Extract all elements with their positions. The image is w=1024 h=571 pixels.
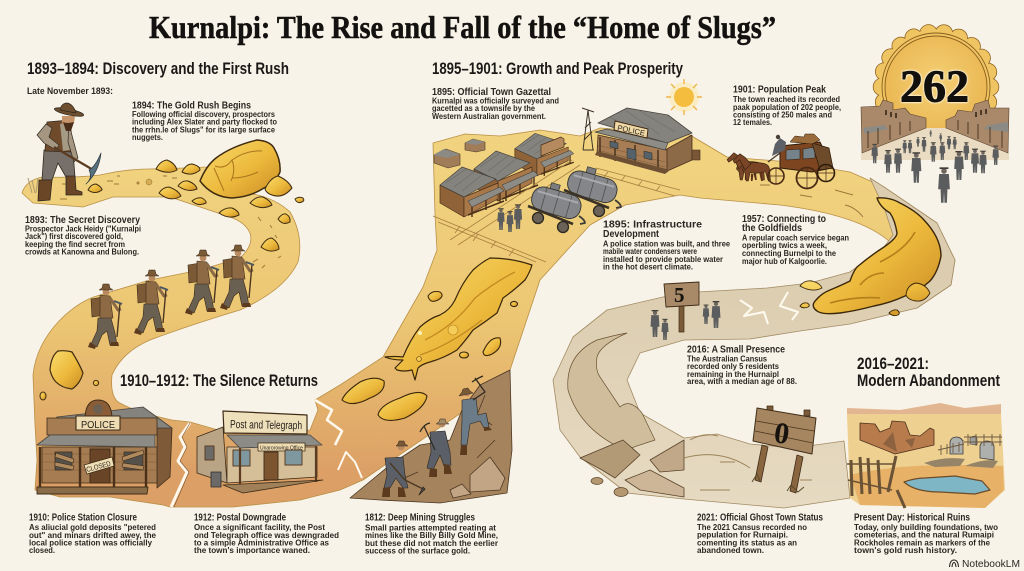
text block: present day ruins: Today, only building foundations, two (854, 523, 998, 532)
text block: 1895 infrastructure: mabile water condensers were (603, 247, 697, 256)
crowd of residents (871, 130, 999, 203)
icon: three townspeople (497, 204, 522, 232)
illustration: closed police station (37, 400, 172, 494)
street scene (861, 100, 1009, 160)
illustration: closed police station: POLICE (81, 419, 115, 431)
text block: 2016 small presence: 2016: A Small Presence (687, 344, 785, 356)
icon: signpost 0 (752, 406, 816, 493)
text block: 1901 population peak: consisting of 250 males and (733, 110, 832, 120)
text block: 1895 town gazetted (432, 87, 559, 121)
text block: present day ruins: town's gold rush history. (854, 546, 957, 555)
text block: 1895 infrastructure: 1895: Infrastructure (603, 220, 702, 230)
illustration: town police station: POLICE (617, 123, 646, 138)
text block: 1957 goldfields connection: major hub of Kalgoorlie. (742, 257, 827, 266)
text block: 1812 deep mining (365, 512, 498, 556)
icon: group of prospectors walking (88, 245, 254, 349)
icon: signpost 5: 5 (674, 283, 684, 307)
section heading: silence returns: 1910–1912: The Silence Returns (120, 371, 318, 390)
text block: 2016 small presence: The Australian Cansus (687, 354, 768, 364)
ruined brick walls (860, 421, 934, 454)
text block: 1893 secret discovery: 1893: The Secret Discovery (25, 215, 140, 226)
text block: 1894 gold rush: the rrhn.le of Slugs" for its large surface (132, 126, 276, 134)
text block: 1893 secret discovery (25, 215, 141, 256)
text block: 2016 small presence (687, 344, 797, 386)
text block: 2021 ghost town: 2021: Official Ghost Town Status (697, 512, 823, 524)
illustration: town buildings (433, 108, 594, 217)
text block: 1894 gold rush: Following official discovery, prospectors (132, 110, 276, 119)
text block: 1901 population peak: 1901: Population Peak (733, 84, 826, 96)
text block: 2021 ghost town: abandoned town. (697, 546, 764, 555)
text block: 2021 ghost town: The 2021 Cansus recorded no (697, 523, 807, 532)
text block: 1901 population peak: The town reached its recorded (733, 95, 840, 104)
text block: 1912 postal downgrade: to a simple Administrative Office as (194, 538, 330, 548)
road crack between police station and post office (171, 400, 362, 507)
text block: present day ruins: Present Day: Historical Ruins (854, 512, 970, 524)
badge: population 262 with crowd: 262 (900, 60, 969, 112)
text block: present day ruins: Rockholes remain as markers of the (854, 538, 991, 548)
text block: 1895 town gazetted: Western Australian government. (432, 112, 546, 121)
icon: gold nuggets (40, 140, 304, 400)
text block: 1893 secret discovery: crowds at Kanowna and Bulong. (25, 248, 139, 256)
text block: 1957 goldfields connection: operbling twics a week, (742, 241, 827, 250)
text block: 1894 gold rush: nuggets. (132, 133, 163, 142)
text block: 1912 postal downgrade (194, 512, 339, 555)
text block: 1895 infrastructure: A police station was built, and three (603, 240, 731, 248)
section heading: discovery: 1893–1894: Discovery and the First Rush (27, 59, 289, 78)
text block: 1893 secret discovery: keeping the find secret from (25, 240, 125, 249)
text block: 2021 ghost town (697, 512, 823, 555)
notebooklm wordmark: NotebookLM (962, 559, 1020, 570)
icon: gold nuggets on lower road (342, 292, 518, 420)
text block: 1894 gold rush: 1894: The Gold Rush Begins (132, 100, 251, 112)
icon: prospector with pick (28, 103, 101, 201)
text block: 2016 small presence: remaining in the Hurnaipl (687, 370, 779, 379)
text block: 1812 deep mining: success of the surface gold. (365, 546, 470, 556)
icon: signpost 0: 0 (772, 416, 791, 451)
section heading: modern abandonment (857, 354, 1000, 390)
icon: water tanks on wagons (528, 163, 621, 232)
text block: 1910 police closure: out" and minars drifted awey, the (29, 531, 157, 540)
water hole (904, 476, 990, 494)
text block: 1910 police closure (29, 512, 157, 555)
text block: 1901 population peak: 12 temales. (733, 118, 772, 127)
text block: 2021 ghost town: pepulation for Rurnaipi. (697, 530, 788, 540)
text block: present day ruins: cometerias, and the natural Rumaipi (854, 530, 994, 540)
icon: signpost 5 (664, 282, 699, 332)
text block: 1910 police closure: closed. (29, 546, 55, 555)
section heading: modern abandonment: 2016–2021: (857, 354, 929, 373)
text block: 1895 infrastructure: Development (603, 229, 660, 240)
illustration: town police station (595, 108, 700, 174)
text block: 1912 postal downgrade: 1912: Postal Downgrade (194, 512, 286, 524)
icon: remaining residents (651, 301, 720, 340)
icon: gold slug on road (385, 258, 532, 380)
text block: 1812 deep mining: mines like the Billy Billy Gold Mine, (365, 531, 498, 540)
icon: windmill (582, 108, 594, 150)
dusty road: decline section (553, 178, 955, 508)
text block: 2021 ghost town: comenting its status as an (697, 538, 797, 548)
text block: 1910 police closure: local police station was officially (29, 538, 153, 548)
title: Kurnalpi: The Rise and Fall of the “Home of Slugs” (149, 9, 776, 45)
badge: population 262 with crowd (861, 30, 1009, 203)
text block: 1893 secret discovery: Prospector Jack Heidy ("Kurnalpi (25, 224, 141, 234)
text block: 1957 goldfields connection: the Goldfields (742, 223, 802, 234)
text block: 1812 deep mining: Small parties attempted reating at (365, 524, 496, 532)
text block: 1894 gold rush (132, 100, 277, 142)
illustration: closed police station: CLOSED (86, 461, 112, 474)
section heading: growth: 1895–1901: Growth and Peak Prosperity (432, 59, 683, 78)
illustration: historical ruins and rockhole (847, 403, 1005, 508)
text block: present day ruins (854, 512, 998, 555)
text block: 1895 infrastructure: in the hot desert climate. (603, 262, 693, 272)
fences (938, 434, 1002, 455)
text block: 1893 secret discovery: Jack") first discovered gold, (25, 232, 123, 241)
text block: 1895 town gazetted: gacetted as a townsife by the (432, 104, 536, 113)
text block: 1957 goldfields connection (742, 214, 849, 266)
text block: 1957 goldfields connection: A repular coach service began (742, 234, 849, 242)
text block: 1812 deep mining: 1812: Deep Mining Struggles (365, 512, 475, 524)
text block: 1894 gold rush: including Alex Slater and party flocked to (132, 118, 277, 126)
text block: 1910 police closure: As aliucial gold deposits "petered (29, 523, 156, 532)
icon: sun (666, 79, 702, 115)
label: late november: Late November 1893: (27, 86, 113, 97)
text block: 1901 population peak: paak population of 202 people, (733, 103, 841, 112)
text block: 1910 police closure: 1910: Police Station Closure (29, 512, 137, 524)
illustration: railway tracks (433, 160, 680, 262)
text block: 2016 small presence: area, with a median age of 88. (687, 377, 797, 386)
text block: 1895 infrastructure: installed to provide potable water (603, 255, 723, 264)
icon: horse-drawn coach (727, 134, 834, 189)
icon: large gold slug on road (800, 198, 941, 316)
text block: 1912 postal downgrade: Once a significant facility, the Post (194, 523, 325, 532)
gravestones (924, 458, 998, 468)
illustration: post and telegraph office: Post and Telegraph (230, 419, 302, 432)
text block: 1957 goldfields connection: connecting Burnelpi to the (742, 249, 836, 258)
illustration: post and telegraph office: Unarorowing Office (260, 446, 303, 452)
text block: 1895 town gazetted: 1895: Official Town Gazettal (432, 87, 551, 98)
illustration: post and telegraph office (197, 411, 323, 493)
illustration: miners on rocky hill (350, 370, 512, 503)
text block: 1912 postal downgrade: ond Telegraph office was dewngraded (194, 531, 339, 540)
text block: 1901 population peak (733, 84, 841, 127)
text block: 1895 infrastructure (603, 220, 731, 272)
text block: 2016 small presence: recorded only 5 residents (687, 362, 780, 371)
text block: 1957 goldfields connection: 1957: Connecting to (742, 214, 826, 225)
text block: 1812 deep mining: but these did not match the eerlier (365, 539, 498, 548)
text block: 1912 postal downgrade: the town's importance waned. (194, 546, 310, 555)
text block: 1895 town gazetted: Kurnalpi was officially surveyed and (432, 96, 559, 106)
broken fence (851, 456, 905, 508)
winding road: gold section (22, 128, 955, 507)
